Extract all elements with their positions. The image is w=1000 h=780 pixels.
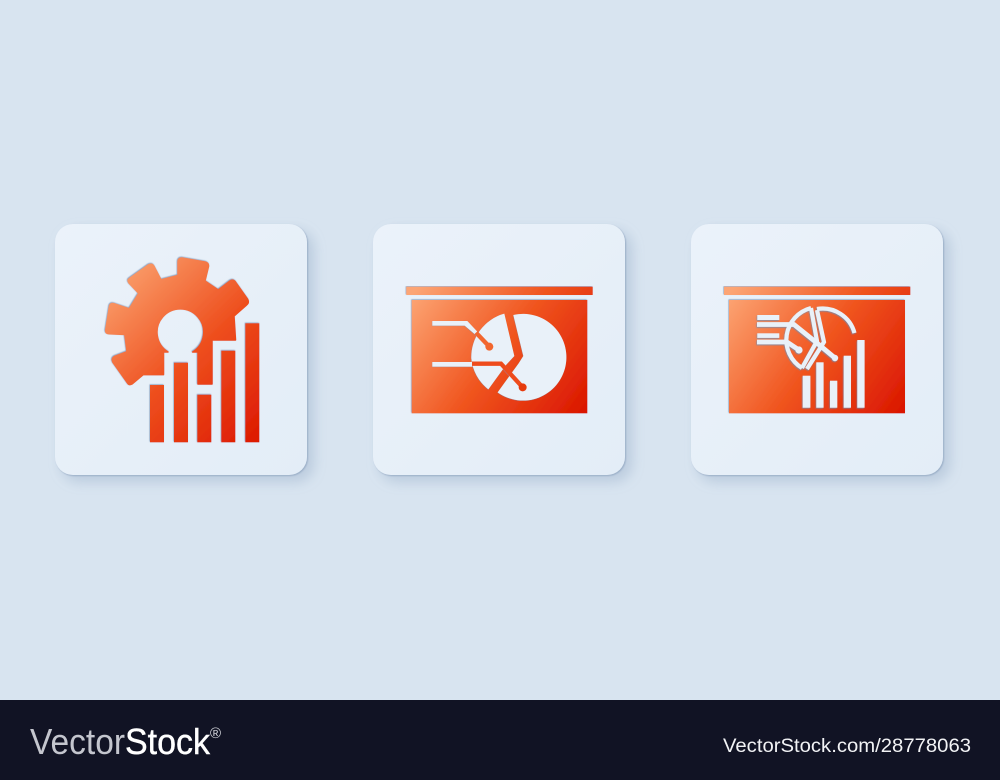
icon: gear with bars xyxy=(106,258,259,442)
logo: VectorStock: Vector xyxy=(30,721,125,762)
gear xyxy=(106,258,248,385)
logo: VectorStock xyxy=(30,721,221,762)
icon: pie outline, callouts and bars xyxy=(757,308,865,408)
card 2: presentation board with pie chart xyxy=(373,224,625,475)
logo: VectorStock: Stock xyxy=(125,721,211,762)
logo: VectorStock: ® xyxy=(210,725,221,742)
icon: pie chart with callouts xyxy=(432,314,566,401)
card 1: gear and bar chart xyxy=(55,224,307,475)
icon: board screen xyxy=(412,300,587,413)
icon: board top rail xyxy=(406,287,593,295)
icon: board screen xyxy=(729,300,905,413)
bars xyxy=(150,323,259,442)
icon: board top rail xyxy=(724,287,910,295)
footer bar xyxy=(0,700,1000,780)
card 3: presentation board with pie and bar charts xyxy=(691,224,943,475)
image id text: VectorStock.com/28778063 xyxy=(723,736,971,757)
